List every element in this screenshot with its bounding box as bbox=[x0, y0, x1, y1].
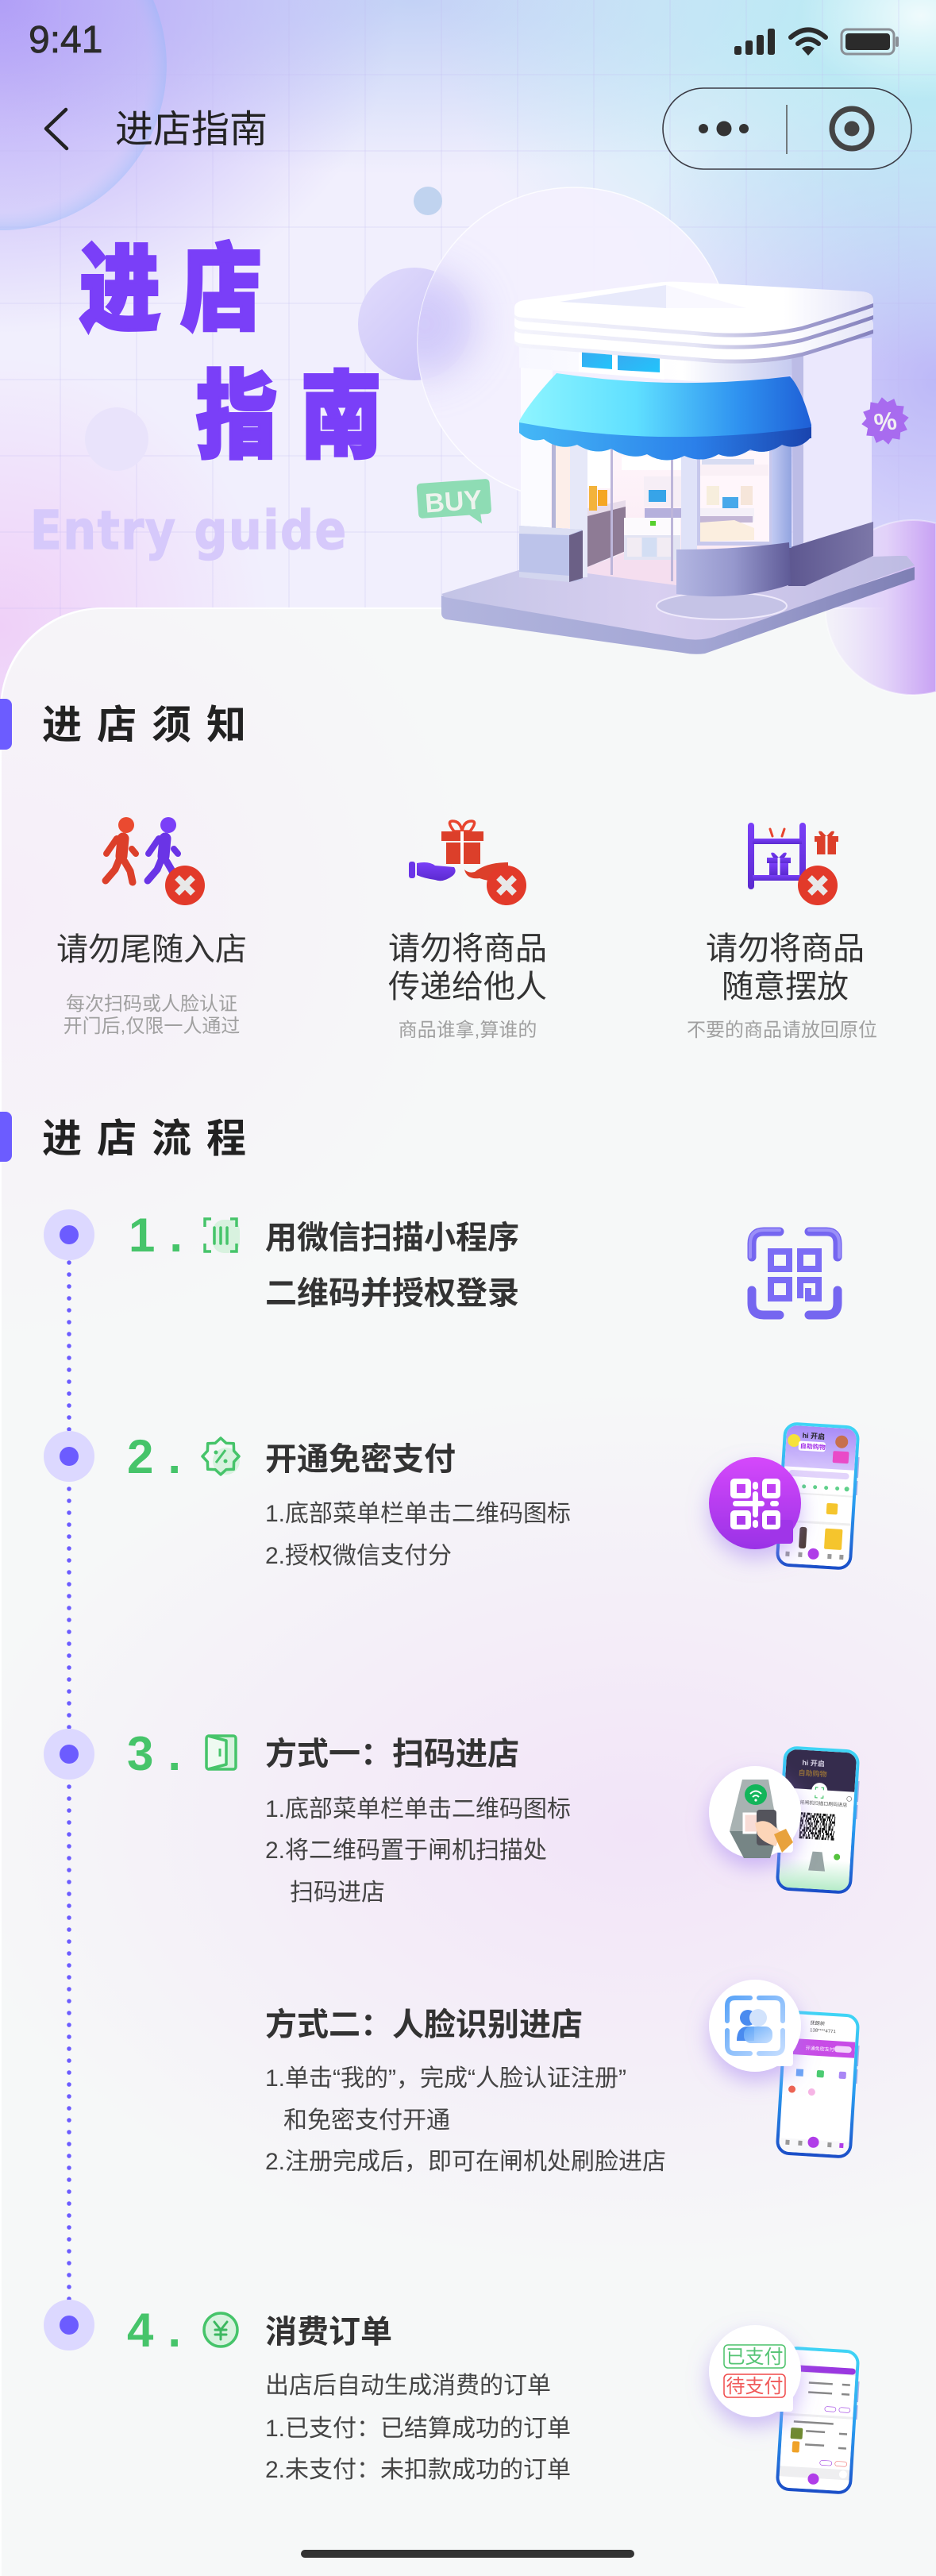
BUY speech tag bbox=[416, 479, 492, 528]
right wall bbox=[792, 337, 872, 550]
node 4 bbox=[44, 2300, 94, 2350]
instructions: 扫码进店 bbox=[290, 1880, 385, 1906]
navigation bar bbox=[44, 87, 912, 170]
phone: 抚朗昶 bbox=[810, 2019, 825, 2026]
QR glyph bbox=[730, 1479, 780, 1529]
rule text: 传递给他人 bbox=[388, 970, 547, 1005]
instructions: 2.将二维码置于闸机扫描处 bbox=[265, 1838, 547, 1864]
rule note: 开门后,仅限一人通过 bbox=[64, 1016, 240, 1037]
step instructions bbox=[265, 1501, 571, 1569]
instructions: 2.注册完成后，即可在闸机处刷脸进店 bbox=[265, 2149, 666, 2175]
paid tag: 已支付 bbox=[726, 2347, 783, 2368]
step number: 4 . bbox=[127, 2304, 181, 2357]
status bar bbox=[29, 19, 899, 61]
phone: 自助购物 bbox=[798, 1768, 827, 1779]
rule text: 随意摆放 bbox=[722, 970, 849, 1005]
step title: 用微信扫描小程序 bbox=[265, 1221, 519, 1255]
rule text bbox=[388, 931, 547, 1005]
small blue ball bbox=[414, 187, 442, 215]
sign fascia bbox=[519, 345, 792, 382]
phone: 开通免密支付 bbox=[806, 2045, 834, 2053]
phone: hi 开启 bbox=[802, 1758, 825, 1768]
glass disc bbox=[417, 187, 719, 492]
rule text: 请勿将商品 bbox=[388, 931, 547, 966]
order description: 1.已支付：已结算成功的订单 bbox=[265, 2416, 571, 2442]
phone bbox=[777, 1423, 861, 1569]
turnstile with hand bbox=[730, 1780, 793, 1858]
timeline bbox=[44, 1209, 94, 2350]
icon: scan bbox=[203, 1217, 240, 1253]
purple blob behind store bbox=[832, 519, 936, 695]
title line 2: 指南 bbox=[196, 364, 405, 470]
notice column 3 bbox=[687, 823, 877, 1041]
order description: 出店后自动生成消费的订单 bbox=[265, 2373, 551, 2399]
shop interior bbox=[551, 429, 792, 585]
icon: back chevron bbox=[44, 108, 68, 151]
title line 1: 进店 bbox=[79, 237, 282, 343]
home indicator bbox=[301, 2550, 634, 2558]
phone: 自助购物 bbox=[800, 1442, 826, 1451]
section marker: process bbox=[0, 1112, 12, 1162]
step title: 二维码并授权登录 bbox=[265, 1276, 519, 1311]
section marker: notice bbox=[0, 699, 12, 750]
step 4 bbox=[127, 2304, 571, 2483]
content card bbox=[0, 607, 936, 2576]
node 2 bbox=[44, 1431, 94, 1482]
icon: discount badge bbox=[201, 1436, 241, 1476]
phone bbox=[777, 1747, 861, 1893]
phone: 138****4771 bbox=[810, 2028, 837, 2034]
hero decorative bubbles bbox=[0, 0, 719, 492]
rule note: 不要的商品请放回原位 bbox=[687, 1020, 877, 1041]
step title: 消费订单 bbox=[265, 2315, 392, 2350]
step 2 bbox=[127, 1430, 571, 1569]
BUY speech tag: BUY bbox=[424, 485, 483, 519]
face scan icon bbox=[727, 1998, 783, 2053]
step number: 1 . bbox=[129, 1209, 183, 1262]
illustration: 3D store bbox=[416, 281, 915, 654]
face bubble bbox=[709, 1980, 801, 2072]
rule note: 每次扫码或人脸认证 bbox=[66, 993, 237, 1015]
heading: notice: 进店须知 bbox=[42, 703, 261, 747]
QR bubble bbox=[709, 1457, 801, 1549]
notice column 2 bbox=[388, 819, 547, 1041]
unpaid tag: 待支付 bbox=[726, 2376, 783, 2397]
order description: 2.未支付：未扣款成功的订单 bbox=[265, 2457, 571, 2483]
left pillar bbox=[521, 365, 553, 529]
method title: 方式一：扫码进店 bbox=[265, 1737, 519, 1772]
background grid bbox=[0, 0, 936, 619]
hero title bbox=[79, 237, 405, 470]
step instructions: 1.底部菜单栏单击二维码图标 bbox=[265, 1501, 571, 1527]
discount badge: % bbox=[872, 406, 899, 438]
awning bbox=[519, 373, 811, 461]
gate bubble bbox=[709, 1766, 801, 1858]
discount badge bbox=[858, 394, 912, 448]
illustration: phone with order tags bbox=[699, 2324, 860, 2494]
icon: 3D QR code bbox=[748, 1228, 842, 1320]
rule note: 商品谁拿,算谁的 bbox=[399, 1020, 537, 1041]
pale ball bbox=[85, 407, 148, 471]
method title: 方式二：人脸识别进店 bbox=[265, 2007, 583, 2042]
node 1 bbox=[44, 1209, 94, 1260]
page title: 进店指南 bbox=[115, 109, 268, 151]
round base bbox=[676, 542, 791, 596]
method two text bbox=[265, 2007, 666, 2175]
hero background bbox=[0, 0, 936, 715]
icon: door bbox=[205, 1734, 237, 1771]
wall skirt bbox=[788, 522, 873, 586]
time: 9:41 bbox=[29, 19, 102, 61]
signal wifi battery bbox=[734, 27, 899, 56]
platform bbox=[441, 556, 915, 654]
phone: 请将闸机扫描口刷码进店 bbox=[795, 1799, 847, 1808]
node 3 bbox=[44, 1729, 94, 1780]
step instructions: 2.授权微信支付分 bbox=[265, 1542, 452, 1569]
phone bbox=[777, 2011, 861, 2158]
lavender sphere bbox=[358, 268, 471, 380]
illustration: phone with face bubble bbox=[699, 1980, 860, 2158]
english subtitle: Entry guide bbox=[30, 499, 348, 561]
step 3 method one bbox=[127, 1727, 571, 1906]
rule text: 请勿尾随入店 bbox=[56, 932, 247, 967]
icon: no misplacing goods bbox=[748, 823, 838, 905]
capsule buttons bbox=[662, 87, 912, 170]
heading: process: 进店流程 bbox=[42, 1116, 261, 1161]
step title bbox=[265, 1221, 519, 1311]
rule note bbox=[64, 993, 240, 1037]
tag bubble bbox=[709, 2325, 801, 2417]
illustration: phone with gate bubble bbox=[700, 1746, 860, 1894]
roof bbox=[514, 282, 873, 364]
instructions: 1.底部菜单栏单击二维码图标 bbox=[265, 1796, 571, 1822]
step title: 开通免密支付 bbox=[265, 1442, 456, 1477]
large corner bubble bbox=[0, 0, 167, 230]
window counter bbox=[519, 526, 583, 582]
icon: no passing goods bbox=[409, 819, 526, 905]
notice column 1 bbox=[56, 817, 247, 1037]
step number: 2 . bbox=[127, 1430, 181, 1483]
rule text: 请勿将商品 bbox=[706, 931, 865, 966]
rule text bbox=[706, 931, 865, 1005]
icon: yen coin bbox=[202, 2312, 239, 2348]
phone bbox=[777, 2347, 861, 2493]
icon: no tailgating bbox=[102, 817, 205, 905]
step number: 3 . bbox=[127, 1727, 181, 1780]
instructions: 1.单击“我的”，完成“人脸认证注册” bbox=[265, 2065, 626, 2092]
phone: hi 开启 bbox=[802, 1431, 825, 1440]
illustration: phone with QR bubble bbox=[699, 1422, 860, 1570]
instructions: 和免密支付开通 bbox=[283, 2107, 450, 2134]
step 1 bbox=[129, 1209, 842, 1320]
